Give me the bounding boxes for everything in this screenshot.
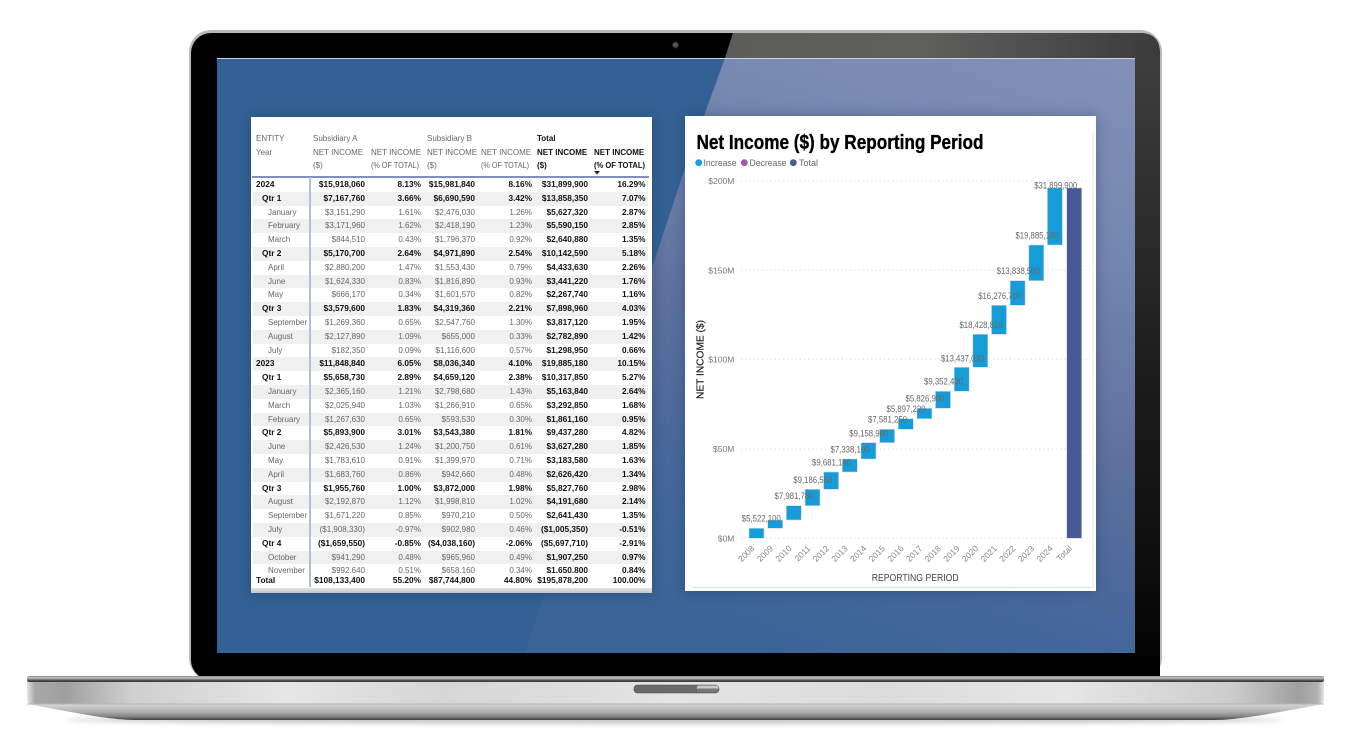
table data rows: Qtr 2 [262, 248, 281, 258]
bar value labels: $18,428,810 [960, 320, 1002, 330]
table data rows: $2,418,190 [435, 221, 475, 230]
table data rows: $4,433,630 [546, 262, 588, 272]
table column headers: Subsidiary A [313, 134, 358, 143]
table column headers: ($) [313, 161, 323, 170]
table data rows: 0.86% [398, 470, 421, 479]
table data rows: 0.92% [509, 235, 532, 244]
y axis gridlines and labels [708, 176, 1090, 543]
table data rows: 1.02% [509, 497, 532, 506]
table data rows: $7,167,760 [323, 193, 365, 203]
bar value labels [742, 180, 1077, 524]
table data rows: 2.89% [397, 372, 421, 382]
table data rows: $1,907,250 [546, 552, 588, 562]
table data rows: $2,192,870 [325, 497, 365, 506]
table data rows: 2024 [256, 179, 274, 189]
x axis year labels: 2011 [792, 543, 813, 563]
table data rows: $11,848,840 [319, 358, 365, 368]
table data rows: 8.13% [397, 179, 421, 189]
table data rows: -2.06% [506, 538, 532, 548]
panel: waterfall chart [685, 116, 1096, 591]
table data rows: $1,116,600 [436, 346, 475, 355]
table data rows: $5,827,760 [546, 483, 588, 493]
table data rows: May [268, 456, 283, 465]
table data rows: 1.35% [622, 234, 646, 244]
table data rows: 0.65% [398, 318, 421, 327]
bar value labels: $13,838,500 [997, 266, 1040, 276]
x axis year labels: 2022 [997, 543, 1018, 564]
table data rows: $6,690,590 [433, 193, 475, 203]
bar value labels: $7,981,780 [774, 491, 814, 501]
table column headers: ($) [537, 161, 547, 170]
x axis year labels: 2014 [848, 543, 869, 564]
table data rows: August [268, 497, 293, 506]
table data rows: 0.48% [509, 470, 532, 479]
table data rows: July [268, 346, 282, 355]
table total row: Total [256, 575, 275, 585]
table data rows: $1,861,160 [546, 414, 588, 424]
table data rows: April [268, 263, 284, 272]
x axis year labels: 2023 [1016, 543, 1036, 564]
table data rows: 1.62% [398, 221, 421, 230]
table column headers: Year [256, 148, 272, 157]
table data rows: $5,658,730 [323, 372, 365, 382]
table data rows: ($1,659,550) [318, 538, 365, 548]
bar value labels: $5,897,220 [886, 404, 926, 414]
table data rows: $1,955,760 [323, 483, 365, 493]
table data rows: $3,872,000 [433, 483, 475, 493]
table data rows: $1,816,890 [435, 277, 475, 286]
table data rows: 2.64% [622, 386, 646, 396]
table data rows: 0.09% [398, 346, 421, 355]
table total row [256, 575, 646, 585]
bar value labels: $9,681,140 [812, 458, 851, 468]
table data rows: 1.43% [509, 387, 532, 396]
table data rows: 1.34% [622, 469, 646, 479]
bar value labels: $7,581,250 [868, 415, 907, 425]
table data rows: $15,918,060 [319, 179, 365, 189]
table data rows: Qtr 1 [262, 193, 281, 203]
table total row: $108,133,400 [314, 575, 365, 585]
table data rows: $5,170,700 [323, 248, 365, 258]
table data rows: 0.71% [509, 456, 532, 465]
x axis year labels: 2024 [1034, 543, 1055, 564]
x axis year labels: Total [1054, 543, 1074, 563]
table data rows: $1,200,750 [435, 442, 475, 451]
table data rows: 0.95% [622, 414, 646, 424]
table data rows: $1,399,970 [435, 456, 475, 465]
table data rows: 0.49% [509, 553, 532, 562]
table data rows: $970,210 [442, 511, 475, 520]
x axis year labels: 2012 [811, 543, 831, 564]
table data rows: 7.07% [622, 193, 646, 203]
table data rows: 1.85% [622, 441, 646, 451]
table column headers: NET INCOME [427, 148, 477, 157]
table data rows: 0.66% [622, 345, 646, 355]
table data rows: $4,191,680 [546, 496, 588, 506]
table data rows [253, 179, 648, 573]
laptop base [27, 676, 1324, 724]
table column headers: (% OF TOTAL) [594, 161, 645, 170]
table data rows: $182,350 [332, 346, 365, 355]
table data rows: October [268, 553, 296, 562]
table data rows: 1.42% [622, 331, 646, 341]
x axis year labels: 2020 [960, 543, 980, 564]
table data rows: $5,627,320 [546, 207, 588, 217]
chart legend: Increase [704, 158, 736, 169]
table data rows: June [268, 277, 285, 286]
x axis year labels: 2019 [941, 543, 962, 564]
table data rows: $7,898,960 [546, 303, 588, 313]
table column headers: Total [537, 134, 556, 143]
table data rows: 0.91% [398, 456, 421, 465]
table data rows: $1,266,910 [435, 401, 475, 410]
table data rows: 4.03% [622, 303, 646, 313]
table data rows: February [268, 221, 300, 230]
table data rows: $4,319,360 [433, 303, 475, 313]
table data rows: $2,267,740 [546, 289, 588, 299]
table total row: 55.20% [393, 575, 421, 585]
table data rows: 0.85% [398, 511, 421, 520]
table data rows: $2,798,680 [435, 387, 475, 396]
table data rows: $10,142,590 [542, 248, 588, 258]
table data rows: 3.42% [508, 193, 532, 203]
table data rows: 0.34% [398, 290, 421, 299]
x axis year labels: 2013 [829, 543, 850, 564]
table data rows: 1.35% [622, 510, 646, 520]
bar value labels: $5,826,980 [906, 393, 944, 403]
table data rows: 1.81% [508, 427, 532, 437]
table data rows: January [268, 208, 296, 217]
chart title: Net Income ($) by Reporting Period [696, 132, 984, 154]
table data rows: 0.61% [509, 442, 532, 451]
table data rows: $2,626,420 [546, 469, 588, 479]
table data rows: $5,163,840 [546, 386, 588, 396]
bar value labels: $7,338,100 [830, 444, 870, 454]
bar value labels: $19,885,180 [1016, 231, 1058, 241]
x axis year labels: 2009 [755, 543, 775, 564]
table total row: $87,744,800 [429, 575, 475, 585]
table data rows: 0.82% [509, 290, 532, 299]
table data rows: $1,998,810 [435, 497, 475, 506]
table data rows: -0.85% [395, 538, 421, 548]
table data rows: 1.83% [397, 303, 421, 313]
trackpad notch [634, 685, 719, 693]
table data rows: June [268, 442, 285, 451]
table data rows: $655,000 [442, 332, 475, 341]
table data rows: 10.15% [617, 358, 646, 368]
x axis year labels: 2008 [736, 543, 757, 564]
table data rows: July [268, 525, 282, 534]
table data rows: 1.76% [622, 276, 646, 286]
table data rows: 1.09% [398, 332, 421, 341]
table data rows: 2.64% [397, 248, 421, 258]
table data rows: $4,971,890 [433, 248, 475, 258]
table data rows: $1,796,370 [435, 235, 475, 244]
table data rows: 1.63% [622, 455, 646, 465]
table data rows: 2.38% [508, 372, 532, 382]
bar value labels: $5,522,100 [742, 514, 781, 524]
bar value labels: $9,158,980 [849, 428, 888, 438]
table data rows: 1.68% [622, 400, 646, 410]
x axis year labels [736, 543, 1074, 564]
table data rows: $1,624,330 [325, 277, 365, 286]
table data rows: 2.21% [508, 303, 532, 313]
table data rows: $9,437,280 [546, 427, 588, 437]
table column headers: (% OF TOTAL) [481, 161, 529, 170]
y axis gridlines and labels: $150M [708, 265, 734, 275]
table data rows: Qtr 1 [262, 372, 281, 382]
x axis year labels: 2017 [904, 543, 924, 564]
table column headers: NET INCOME [481, 148, 531, 157]
table column headers: NET INCOME [594, 148, 645, 157]
table data rows: $2,640,880 [546, 234, 588, 244]
table data rows: $8,036,340 [433, 358, 475, 368]
table data rows: -0.51% [619, 524, 646, 534]
table data rows: 8.16% [508, 179, 532, 189]
table data rows: $1,553,430 [435, 263, 475, 272]
table data rows: 1.00% [397, 483, 421, 493]
y axis title: NET INCOME ($) [696, 320, 706, 399]
table data rows: 2.98% [622, 483, 646, 493]
table data rows: 1.61% [398, 208, 421, 217]
table data rows: $15,981,840 [429, 179, 475, 189]
table data rows: 1.03% [398, 401, 421, 410]
table total row: $195,878,200 [537, 575, 588, 585]
table column headers: NET INCOME [371, 148, 421, 157]
x axis year labels: 2018 [922, 543, 943, 564]
table data rows: September [268, 318, 307, 327]
table data rows: $1,601,570 [435, 290, 475, 299]
table data rows: Qtr 3 [262, 303, 281, 313]
x axis year labels: 2010 [773, 543, 794, 564]
waterfall bars [749, 188, 1082, 538]
table data rows: 1.23% [509, 221, 532, 230]
table data rows: $3,292,850 [546, 400, 588, 410]
table data rows: $5,590,150 [546, 220, 588, 230]
table data rows: $5,893,900 [323, 427, 365, 437]
table column headers: (% OF TOTAL) [371, 161, 419, 170]
table data rows: $3,441,220 [546, 276, 588, 286]
table data rows: $2,365,160 [325, 387, 365, 396]
table data rows: $2,127,890 [325, 332, 365, 341]
table data rows: $2,547,760 [435, 318, 475, 327]
table data rows: 0.65% [398, 415, 421, 424]
y axis gridlines and labels: $200M [708, 176, 734, 186]
table data rows: 0.30% [509, 415, 532, 424]
table data rows: 1.24% [398, 442, 421, 451]
table data rows: $3,579,600 [323, 303, 365, 313]
table data rows: 4.10% [508, 358, 532, 368]
bar value labels: $9,352,430 [924, 377, 963, 387]
table total row: 44.80% [504, 575, 532, 585]
table data rows: 0.50% [509, 511, 532, 520]
table data rows: $2,782,890 [546, 331, 588, 341]
table data rows: $2,025,940 [325, 401, 365, 410]
bar value labels: $9,186,560 [793, 475, 832, 485]
chart legend [695, 158, 818, 169]
table data rows: $965,960 [442, 553, 475, 562]
table data rows: -2.91% [619, 538, 646, 548]
x axis title: REPORTING PERIOD [872, 573, 959, 584]
table data rows: 1.12% [398, 497, 421, 506]
x axis year labels: 2015 [867, 543, 887, 564]
x axis year labels: 2021 [978, 543, 999, 564]
table data rows: 2.85% [622, 220, 646, 230]
table data rows: $3,183,580 [546, 455, 588, 465]
table data rows: January [268, 387, 296, 396]
table data rows: March [268, 235, 290, 244]
table data rows: $3,171,960 [325, 221, 365, 230]
y axis gridlines and labels: $50M [713, 444, 734, 454]
table data rows: $942,660 [442, 470, 475, 479]
table data rows: 0.79% [509, 263, 532, 272]
table data rows: 5.18% [622, 248, 646, 258]
table data rows: August [268, 332, 293, 341]
table data rows: 5.27% [622, 372, 646, 382]
panel: net income table [251, 117, 652, 593]
table data rows: 0.57% [509, 346, 532, 355]
table data rows: $2,880,200 [325, 263, 365, 272]
chart legend: Decrease [750, 158, 786, 169]
table data rows: $902,980 [442, 525, 475, 534]
table data rows: 1.98% [508, 483, 532, 493]
bar value labels: $31,899,900 [1034, 180, 1077, 190]
table data rows: 0.43% [398, 235, 421, 244]
table data rows: $1,298,950 [546, 345, 588, 355]
table data rows: $13,858,350 [542, 193, 588, 203]
table data rows: 16.29% [617, 179, 646, 189]
table data rows: 1.16% [622, 289, 646, 299]
webcam [672, 42, 678, 48]
table data rows: $3,627,280 [546, 441, 588, 451]
table data rows: $2,641,430 [546, 510, 588, 520]
table data rows: $1,683,760 [325, 470, 365, 479]
table data rows: 0.48% [398, 553, 421, 562]
table data rows: 4.82% [622, 427, 646, 437]
table data rows: 2.87% [622, 207, 646, 217]
table data rows: -0.97% [396, 525, 421, 534]
table data rows: 1.21% [398, 387, 421, 396]
table data rows: 1.30% [509, 318, 532, 327]
table data rows: 2.54% [508, 248, 532, 258]
bar value labels: $13,437,030 [941, 353, 984, 363]
table data rows: $3,151,290 [325, 208, 365, 217]
table data rows: $666,170 [332, 290, 365, 299]
table data rows: May [268, 290, 283, 299]
table data rows: ($1,908,330) [320, 525, 365, 534]
x axis year labels: 2016 [885, 543, 906, 564]
table data rows: 0.65% [509, 401, 532, 410]
table column headers: ENTITY [256, 134, 285, 143]
table data rows: $19,885,180 [542, 358, 588, 368]
table data rows: $2,426,530 [325, 442, 365, 451]
chart legend: Total [799, 158, 818, 169]
table data rows: $1,267,630 [325, 415, 365, 424]
table column headers: NET INCOME [537, 148, 588, 157]
table data rows: $3,543,380 [433, 427, 475, 437]
table column headers: Subsidiary B [427, 134, 472, 143]
table data rows: $1,783,610 [325, 456, 365, 465]
table data rows: March [268, 401, 290, 410]
table column headers: ($) [427, 161, 437, 170]
table data rows: $941,290 [332, 553, 365, 562]
table data rows: $31,899,900 [542, 179, 588, 189]
table data rows: Qtr 4 [262, 538, 281, 548]
table data rows: ($5,697,710) [541, 538, 588, 548]
table data rows: 6.05% [397, 358, 421, 368]
table data rows: 3.66% [397, 193, 421, 203]
table data rows: 1.26% [509, 208, 532, 217]
laptop screen [217, 58, 1135, 653]
table data rows: 0.83% [398, 277, 421, 286]
table data rows: $593,530 [442, 415, 475, 424]
table data rows: $4,659,120 [433, 372, 475, 382]
y axis gridlines and labels: $100M [708, 354, 734, 364]
table data rows: 2.26% [622, 262, 646, 272]
table data rows: $1,671,220 [325, 511, 365, 520]
table data rows: April [268, 470, 284, 479]
table data rows: September [268, 511, 307, 520]
table data rows: February [268, 415, 300, 424]
table data rows: 3.01% [397, 427, 421, 437]
table data rows: $844,510 [332, 235, 365, 244]
table data rows: 1.47% [398, 263, 421, 272]
table data rows: 0.93% [509, 277, 532, 286]
bar value labels: $16,276,700 [978, 291, 1021, 301]
y axis gridlines and labels: $0M [718, 533, 734, 543]
table data rows: ($1,005,350) [541, 524, 588, 534]
table column headers [256, 134, 645, 174]
laptop lid [189, 30, 1162, 680]
table data rows: Qtr 3 [262, 483, 281, 493]
table data rows: $10,317,850 [542, 372, 588, 382]
table data rows: Qtr 2 [262, 427, 281, 437]
table column headers: NET INCOME [313, 148, 363, 157]
table data rows: 0.46% [509, 525, 532, 534]
table data rows: 0.97% [622, 552, 646, 562]
table total row: 100.00% [613, 575, 646, 585]
table data rows: $3,817,120 [546, 317, 588, 327]
table data rows: 2023 [256, 358, 274, 368]
table data rows: 2.14% [622, 496, 646, 506]
table data rows: ($4,038,160) [428, 538, 475, 548]
table data rows: 1.95% [622, 317, 646, 327]
table data rows: $2,476,030 [435, 208, 475, 217]
table data rows: $1,269,360 [325, 318, 365, 327]
table data rows: 0.33% [509, 332, 532, 341]
